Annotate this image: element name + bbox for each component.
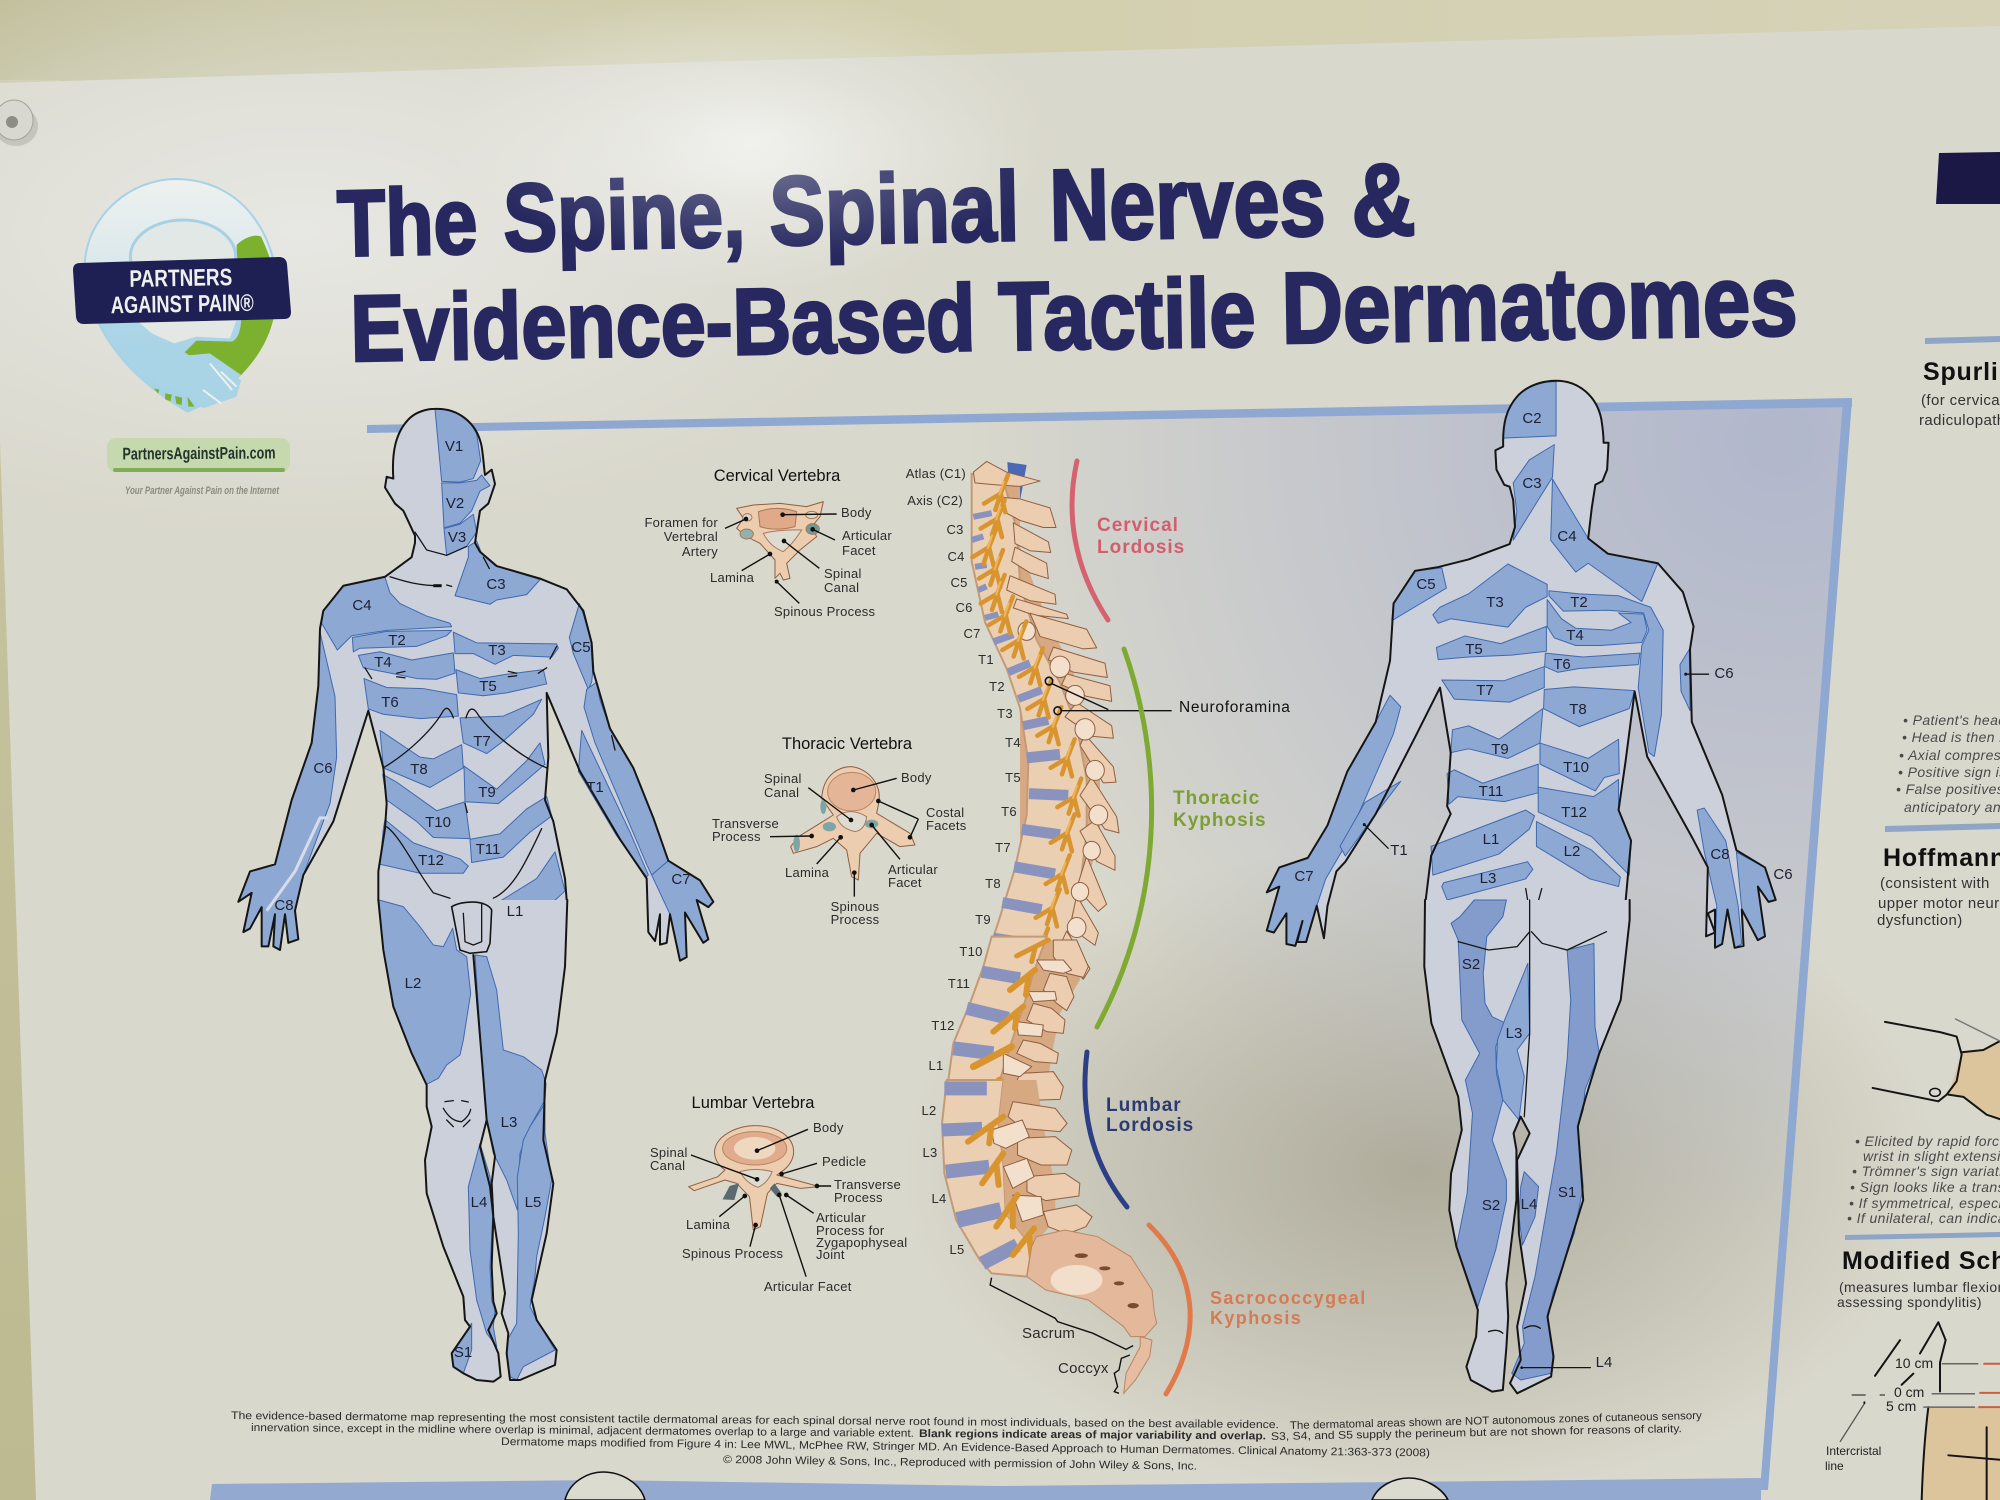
lumbar labels: Spinal [650, 1145, 688, 1160]
front labels: C7 [671, 871, 691, 888]
lumbar labels: Spinous Process [682, 1246, 784, 1261]
thoracic labels: Spinal [764, 771, 802, 786]
thoracic labels [712, 770, 967, 927]
back labels [1294, 410, 1793, 1371]
vertebral level labels [906, 466, 1109, 1377]
back upper outline [1267, 381, 1776, 948]
coccyx [1124, 1337, 1152, 1393]
front labels: L2 [405, 975, 421, 992]
sacrum and coccyx braces [990, 1278, 1133, 1393]
curve: lumbar lordosis: Lordosis [1106, 1115, 1194, 1136]
logo ring and hands [85, 179, 277, 412]
back labels: S2 [1462, 956, 1480, 973]
cervical labels: Lamina [710, 570, 755, 585]
back labels: T9 [1491, 741, 1509, 758]
mid processes [1053, 940, 1088, 977]
curve: lumbar lordosis [1085, 1052, 1194, 1207]
thoracic labels: Process [831, 912, 880, 927]
mid discs [953, 972, 1020, 1053]
pushpin [0, 100, 38, 146]
front labels: C3 [486, 576, 506, 593]
logo name text [110, 264, 254, 319]
title: & [1350, 142, 1416, 258]
front anatomy lines [365, 532, 615, 898]
cervical labels: Artery [682, 544, 718, 559]
lumbar labels: Zygapophyseal [816, 1235, 907, 1250]
vertebral level labels: T7 [995, 840, 1011, 855]
back labels: C8 [1710, 846, 1730, 863]
figure: back dermatomes [1267, 381, 1793, 1393]
frame: top rule and right rule [367, 398, 1852, 1490]
thoracic labels: Spinous [831, 899, 880, 914]
vertebral level labels: T3 [997, 706, 1013, 721]
front labels: S1 [454, 1344, 472, 1361]
back legs [1424, 900, 1630, 1393]
vertebral level labels: T12 [931, 1018, 955, 1033]
front labels: V2 [446, 495, 464, 512]
sidebar: Hoffmann's: dysfunction) [1877, 912, 1963, 929]
footnote: Dermatome maps modified from Figure 4 in: Lee MWL, McPhee RW, Stringer MD. An Evidence-Based Approach to Human Dermatomes. Clinical Anatomy 21:363-373 (2008) [501, 1436, 1430, 1459]
upper spine: cervical and thoracic [972, 461, 1172, 986]
lower spine: lumbar and sacrum [942, 1080, 1157, 1393]
sidebar: Spurling's [1896, 336, 2000, 815]
bottom blue band with head tops [210, 1472, 1761, 1500]
curve: lumbar lordosis: Lumbar [1106, 1095, 1182, 1116]
back legs outline [1424, 900, 1630, 1393]
front labels [274, 438, 691, 1361]
lumbar labels: Pedicle [822, 1154, 866, 1169]
lumbar discs [942, 1088, 1018, 1263]
lumbar processes [1008, 1102, 1092, 1234]
vertebral level labels: C4 [947, 549, 965, 564]
front labels: V3 [448, 529, 466, 546]
logo name band [73, 257, 291, 324]
front upper zones [435, 409, 481, 482]
back labels: L1 [1483, 831, 1499, 848]
front labels: T4 [374, 654, 392, 671]
back upper body [1267, 381, 1776, 948]
vertebral level labels: L4 [932, 1191, 946, 1206]
footnote: © 2008 John Wiley & Sons, Inc., Reproduced with permission of John Wiley & Sons, Inc. [723, 1454, 1197, 1473]
front labels: T8 [410, 761, 428, 778]
logo name text: PARTNERS [129, 264, 233, 293]
lumbar labels: Body [813, 1120, 844, 1135]
front labels: C4 [352, 597, 372, 614]
vertebral level labels: Atlas (C1) [906, 466, 966, 481]
front leg zones [379, 900, 471, 1084]
front upper outline [238, 409, 713, 961]
curve: cervical lordosis [1072, 461, 1185, 620]
vertebral level labels: T8 [985, 876, 1001, 891]
curve: cervical lordosis: Lordosis [1097, 537, 1185, 558]
Schober labels: 10 cm [1895, 1355, 1933, 1371]
front labels: C8 [274, 897, 294, 914]
vertebral level labels: L3 [923, 1145, 937, 1160]
vertebral level labels: C7 [963, 626, 981, 641]
vertebral level labels: L5 [950, 1242, 964, 1257]
front legs [378, 900, 567, 1382]
back leader lines [1364, 674, 1709, 921]
vertebral level labels: T9 [975, 912, 991, 927]
sidebar: Modified Schober [1825, 1232, 2000, 1500]
front labels: L3 [501, 1114, 517, 1131]
Spurling's bullets [1896, 712, 2000, 815]
back labels: S2 [1482, 1197, 1500, 1214]
vertebral level labels: Axis (C2) [907, 493, 963, 508]
lumbar labels [650, 1120, 907, 1294]
front labels: L4 [471, 1194, 487, 1211]
neuroforamina markers [1045, 677, 1172, 715]
lumbar backing [999, 1080, 1055, 1247]
cervical labels: Body [841, 505, 872, 520]
vertebral level labels: C3 [946, 522, 964, 537]
logo name text: AGAINST PAIN® [111, 290, 254, 319]
curve: thoracic kyphosis: Thoracic [1173, 788, 1260, 809]
vertebral level labels: T11 [948, 976, 970, 991]
back labels: T6 [1553, 656, 1571, 673]
frame tint [212, 402, 1850, 1485]
nerve roots [972, 475, 1081, 966]
thoracic labels: Facet [888, 875, 922, 890]
back labels: C6 [1773, 866, 1793, 883]
front labels: V1 [445, 438, 463, 455]
footnote: The evidence-based dermatome map representing the most consistent tactile dermatomal areas for each spinal dorsal nerve root found in most individuals, based on the best available evidence. [231, 1410, 1279, 1431]
title: Nerves [1048, 145, 1326, 262]
Schober labels: 0 cm [1894, 1384, 1924, 1400]
thoracic title: Thoracic Vertebra [782, 735, 913, 753]
back upper zones [1503, 381, 1556, 438]
back labels: T5 [1465, 641, 1483, 658]
sacrum [1027, 1230, 1157, 1337]
Schober illustration [1840, 1322, 2000, 1500]
spine illustration [942, 461, 1172, 1393]
vertebral column [972, 474, 1087, 986]
front labels: T2 [388, 632, 406, 649]
thoracic labels: Transverse [712, 816, 779, 831]
tagline: Your Partner Against Pain on the Internet [125, 485, 280, 497]
backing tissue behind processes [987, 479, 1100, 979]
wall background [0, 0, 2000, 110]
back labels: T4 [1566, 627, 1584, 644]
mid spine: T10 to L2 [943, 937, 1088, 1120]
back leg zones [1451, 900, 1506, 1307]
title [336, 142, 1798, 381]
back labels: C5 [1416, 576, 1436, 593]
title: The [336, 168, 478, 276]
intervertebral discs [972, 513, 1068, 979]
front legs outline [378, 900, 567, 1382]
lumbar nerve roots [968, 1117, 1034, 1257]
back labels: C4 [1557, 528, 1577, 545]
vertebral level labels: T5 [1005, 770, 1021, 785]
lumbar labels: Lamina [686, 1217, 731, 1232]
front labels: C6 [313, 760, 333, 777]
mid backing [1000, 940, 1080, 1107]
front labels: C5 [571, 639, 591, 656]
back legs silhouette [1424, 900, 1630, 1393]
thoracic labels: Process [712, 829, 761, 844]
cervical title: Cervical Vertebra [714, 467, 841, 485]
vertebral level labels: T6 [1001, 804, 1017, 819]
cervical labels: Facet [842, 543, 876, 558]
back labels: S1 [1558, 1184, 1576, 1201]
cervical labels: Vertebral [664, 529, 718, 544]
back labels: L4 [1521, 1196, 1537, 1213]
curve: sacrococcygeal kyphosis: Kyphosis [1210, 1308, 1302, 1328]
lumbar labels: Articular [816, 1210, 866, 1225]
sidebar: Hoffmann's [1847, 823, 2000, 1226]
footnote: The dermatomal areas shown are NOT autonomous zones of cutaneous sensory [1290, 1410, 1702, 1432]
front labels: T3 [488, 642, 506, 659]
mid vertebral column [943, 937, 1047, 1120]
logo: Partners Against Pain: PartnersAgainstPain.com [122, 443, 276, 464]
vertebral level labels: L2 [922, 1103, 936, 1118]
lumbar labels: Process for [816, 1223, 885, 1238]
curve: cervical lordosis: Cervical [1097, 515, 1179, 536]
wall strip at left of poster [0, 80, 60, 1500]
front labels: T12 [418, 852, 444, 869]
buttock and heel lines [1458, 900, 1606, 1368]
title: Evidence-Based [350, 265, 976, 381]
lumbar labels: Joint [816, 1247, 845, 1262]
back labels: T7 [1476, 682, 1494, 699]
spinous processes [973, 461, 1040, 486]
lumbar labels: Process [834, 1190, 883, 1205]
vertebral level labels: Coccyx [1058, 1360, 1109, 1377]
cervical labels: Spinal [824, 566, 862, 581]
back upper silhouette [1267, 381, 1776, 948]
vertebral level labels: T10 [959, 944, 983, 959]
sidebar: Hoffmann's: (consistent with [1880, 875, 1990, 892]
Schober labels: line [1825, 1459, 1844, 1473]
front labels: L1 [507, 903, 523, 920]
sidebar header bar [1936, 152, 2000, 204]
website pill [107, 438, 290, 472]
front labels: T7 [473, 733, 491, 750]
thoracic labels: Lamina [785, 865, 830, 880]
lumbar illustration [689, 1126, 831, 1277]
neuroforamina label: Neuroforamina [1179, 699, 1291, 716]
thoracic labels: Costal [926, 805, 964, 820]
vertebral level labels: C6 [955, 600, 973, 615]
lumbar column [942, 1080, 1032, 1277]
hand illustration [1873, 1019, 2000, 1119]
lumbar facets [992, 1120, 1043, 1222]
back labels: T2 [1570, 594, 1588, 611]
vertebral level labels: C5 [950, 575, 968, 590]
thoracic vertebra [712, 735, 967, 927]
footnote: S3, S4, and S5 supply the perineum but are not shown for reasons of clarity. [1271, 1423, 1682, 1443]
Schober labels: 5 cm [1886, 1398, 1916, 1414]
title: Dermatomes [1281, 245, 1798, 365]
cervical labels [644, 505, 892, 619]
articular knobs [1018, 622, 1108, 937]
logo: Partners Against Pain [73, 179, 291, 497]
curve: thoracic kyphosis: Kyphosis [1173, 810, 1267, 831]
back labels: T12 [1561, 804, 1587, 821]
front upper body [238, 409, 713, 961]
kneecap lines [443, 1101, 471, 1127]
front labels: T11 [476, 841, 500, 858]
back labels: T1 [1390, 842, 1408, 859]
vertebral level labels: T2 [989, 679, 1005, 694]
back labels: C2 [1522, 410, 1542, 427]
vertebral level labels: T1 [978, 652, 994, 667]
thoracic labels: Body [901, 770, 932, 785]
cervical illustration [725, 502, 837, 603]
title: Tactile [998, 258, 1256, 371]
footnote [231, 1410, 1702, 1473]
front labels: L5 [525, 1194, 541, 1211]
sidebar: Modified Schober: assessing spondylitis) [1837, 1294, 1982, 1310]
lumbar labels: Articular Facet [764, 1279, 852, 1294]
front legs silhouette [378, 900, 567, 1382]
front upper silhouette [238, 409, 713, 961]
thoracic illustration [770, 767, 918, 897]
thoracic labels: Articular [888, 862, 938, 877]
Schober labels [1825, 1355, 1933, 1473]
figure: front dermatomes [238, 409, 713, 1382]
vertebral level labels: L1 [929, 1058, 943, 1073]
back labels: T3 [1486, 594, 1504, 611]
back labels: L2 [1564, 843, 1580, 860]
cervical vertebra [644, 467, 892, 619]
curve: sacrococcygeal kyphosis: Sacrococcygeal [1210, 1288, 1367, 1308]
vertebral level labels: Sacrum [1022, 1325, 1075, 1342]
curve: thoracic kyphosis [1097, 649, 1267, 1027]
glare over title [480, 80, 1040, 260]
thoracic labels: Facets [926, 818, 967, 833]
back labels: L3 [1506, 1025, 1522, 1042]
lumbar vertebra [650, 1094, 907, 1294]
front labels: T10 [425, 814, 451, 831]
vertebral level labels: T4 [1005, 735, 1021, 750]
lumbar title: Lumbar Vertebra [692, 1094, 815, 1112]
back labels: C6 [1714, 665, 1734, 682]
back labels: C7 [1294, 868, 1314, 885]
back labels: T10 [1563, 759, 1589, 776]
lumbar labels: Canal [650, 1158, 685, 1173]
footnote: Blank regions indicate areas of major variability and overlap. [919, 1428, 1266, 1442]
title: Spine, [502, 160, 746, 272]
mid facets [1037, 960, 1072, 973]
front labels: T6 [381, 694, 399, 711]
front labels: T1 [586, 779, 604, 796]
cervical labels: Articular [842, 528, 892, 543]
back labels: C3 [1522, 475, 1542, 492]
lumbar labels: Transverse [834, 1177, 901, 1192]
genitals [452, 902, 492, 953]
back labels: L3 [1480, 870, 1496, 887]
front labels: T9 [478, 784, 496, 801]
mid nerve roots [968, 940, 1048, 1108]
back labels: L4 [1596, 1354, 1612, 1371]
cervical labels: Canal [824, 580, 859, 595]
back labels: T8 [1569, 701, 1587, 718]
cervical labels: Spinous Process [774, 604, 876, 619]
cervical labels: Foramen for [644, 515, 718, 530]
footnote: innervation since, except in the midline where overlap is minimal, adjacent dermatomes overlap to a large and variable extent. [251, 1422, 914, 1440]
Schober labels: Intercristal [1826, 1444, 1881, 1458]
Hoffmann's bullets [1847, 1133, 2000, 1226]
back labels: T11 [1479, 783, 1503, 800]
curve: sacrococcygeal kyphosis [1149, 1225, 1367, 1394]
title: Spinal [768, 151, 1020, 266]
front labels: T5 [479, 678, 497, 695]
thoracic labels: Canal [764, 785, 799, 800]
